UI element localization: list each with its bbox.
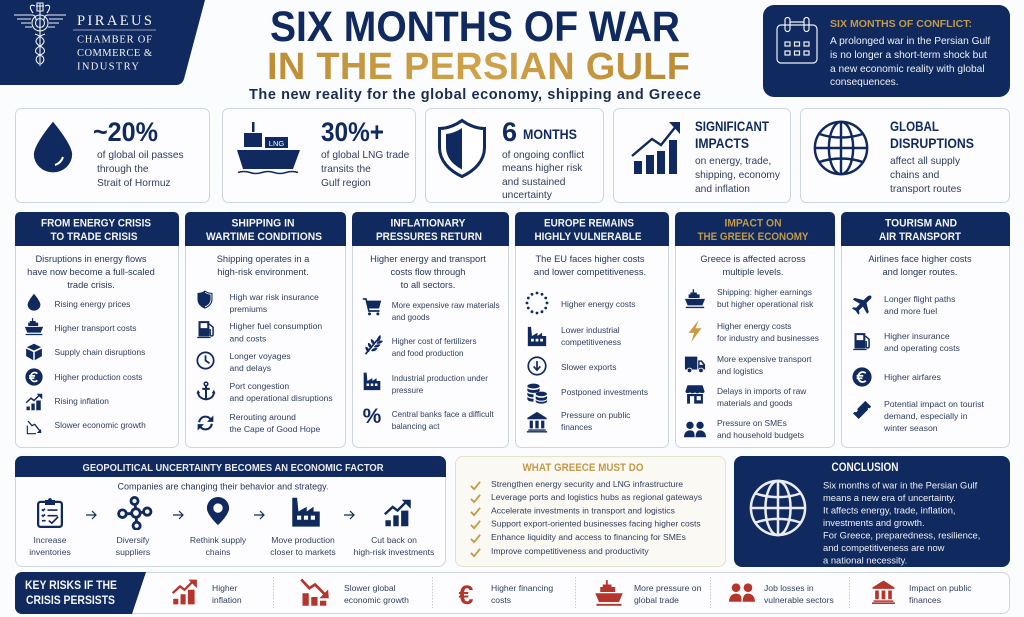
intro text: Airlines face higher costs [868, 254, 972, 264]
risk: public finances: finances [909, 595, 941, 605]
panel: key risks [15, 572, 1010, 614]
item: central banks: % [363, 405, 382, 428]
item: shipping: Shipping: higher earnings [717, 287, 812, 297]
check list [471, 479, 702, 556]
stat text: and sustained [502, 177, 566, 188]
stat text: of global oil passes [97, 150, 184, 161]
stat text: affect all supply [890, 156, 961, 167]
intro text: trade crisis. [67, 280, 115, 290]
item: insurance [853, 331, 960, 353]
panel: tourism and air transport [841, 212, 1010, 448]
title [267, 3, 690, 88]
item: public finances: finances [561, 422, 592, 432]
item: public finances [527, 410, 630, 433]
risk: global trade [595, 580, 702, 606]
intro text: costs flow through [391, 267, 465, 277]
item: port congestion [196, 381, 333, 403]
stat heading: GLOBAL [890, 119, 939, 134]
item: airfares [852, 367, 942, 387]
title: IN THE PERSIAN GULF [267, 46, 690, 88]
item: higher energy costs [526, 292, 635, 314]
step: diversify suppliers [116, 497, 151, 557]
conclusion text: means a new era of uncertainty. [823, 492, 956, 503]
stat heading: SIGNIFICANT [695, 119, 770, 134]
callout: six months of conflict [763, 5, 1010, 97]
heading: SHIPPING IN [232, 218, 295, 230]
arrow [173, 511, 183, 519]
step: move production [270, 498, 336, 557]
item: transport [685, 354, 812, 376]
intro text: The EU faces higher costs [535, 254, 645, 264]
stat text: transport routes [890, 184, 961, 195]
callout text: a new economic reality with global [830, 64, 985, 75]
intro text: and lower competitiveness. [534, 267, 646, 277]
item: tourist demand: winter season [883, 423, 938, 433]
conclusion text: a national necessity. [823, 554, 907, 566]
conclusion text: For Greece, preparedness, resilience, [823, 530, 980, 540]
item: industrial production: Industrial production under [392, 374, 488, 383]
item: fertilizers: Higher cost of fertilizers [392, 337, 477, 346]
item: central banks [363, 405, 494, 431]
intro text: and longer routes. [883, 267, 957, 277]
risk: job losses: Job losses in [764, 583, 814, 593]
item: higher production costs [25, 368, 142, 386]
item: war risk premiums: premiums [230, 304, 267, 314]
risk: public finances: Impact on public [909, 583, 972, 593]
item: port congestion: and operational disruptions [230, 393, 333, 403]
check list: Leverage ports and logistics hubs as regional gateways [491, 492, 702, 502]
intro text: multiple levels. [723, 267, 783, 277]
stat text: Strait of Hormuz [97, 178, 171, 189]
subtitle: The new reality for the global economy, shipping and Greece [249, 87, 701, 103]
item: imports: Delays in imports of raw [717, 386, 807, 396]
check list: Accelerate investments in transport and logistics [491, 506, 675, 516]
item: lower competitiveness: Lower industrial [561, 325, 620, 335]
item: rerouting [198, 412, 320, 434]
organisation name: PIRAEUS [77, 13, 152, 29]
item: central banks: Central banks face a difficult [392, 410, 494, 419]
item: tourist demand: demand, especially in [884, 411, 968, 421]
stat text: chains and [890, 170, 940, 181]
arrow [344, 511, 354, 519]
stat heading [695, 119, 770, 151]
intro text: Companies are changing their behavior and strategy. [118, 482, 328, 492]
stat text: of global LNG trade [321, 150, 410, 161]
stat value: 6 [502, 117, 517, 147]
conclusion text: It affects energy, trade, inflation, [823, 504, 956, 516]
check list: Improve competitiveness and productivity [491, 546, 649, 556]
item: flight paths [852, 294, 956, 316]
heading: EUROPE REMAINS [544, 218, 634, 230]
conclusion text: Six months of war in the Persian Gulf [823, 480, 978, 490]
risk: global trade: global trade [634, 595, 679, 605]
item: longer voyages: and delays [230, 363, 271, 373]
item: higher transport costs [25, 318, 136, 335]
item: shipping [685, 287, 814, 309]
item: fertilizers [365, 335, 477, 358]
step: diversify suppliers: Diversify [117, 535, 150, 545]
item: slower economic growth: Slower economic growth [54, 420, 146, 430]
heading: WARTIME CONDITIONS [206, 231, 322, 243]
stat card: global disruptions [800, 108, 1010, 202]
item: fertilizers: and food production [392, 349, 464, 358]
risk: higher inflation [173, 580, 242, 605]
heading: TOURISM AND [885, 218, 957, 230]
item: rising energy prices: Rising energy prices [54, 299, 130, 309]
stat card: significant impacts [614, 108, 790, 202]
icon: oil drop [34, 122, 72, 172]
item: port congestion: Port congestion [230, 381, 289, 391]
stat card: oil [16, 108, 210, 202]
item: industrial production: pressure [392, 386, 424, 395]
heading: AIR TRANSPORT [879, 231, 961, 243]
callout text: consequences. [830, 77, 899, 88]
stat text: Gulf region [321, 178, 371, 189]
step: diversify suppliers: suppliers [116, 547, 150, 557]
stat text: and inflation [695, 184, 750, 195]
item: lower competitiveness: competitiveness [561, 337, 621, 347]
item: central banks: balancing act [392, 422, 440, 431]
arrow [86, 511, 96, 519]
risk: financing costs: Higher financing [491, 583, 553, 593]
stat heading: DISRUPTIONS [890, 136, 974, 151]
icon: globe [815, 122, 867, 174]
organisation name: CHAMBER OF [77, 34, 152, 46]
panel: shipping in wartime conditions [185, 212, 346, 448]
item: postponed investments [527, 384, 648, 404]
organisation name [73, 13, 156, 72]
item: fuel consumption [197, 321, 322, 344]
stat text: transits the [321, 164, 371, 175]
heading: KEY RISKS IF THE [25, 580, 117, 592]
item: rising energy prices [28, 294, 130, 311]
risk: job losses [729, 583, 834, 605]
item: transport: More expensive transport [717, 354, 812, 364]
step: rethink supply chains: chains [206, 547, 230, 557]
item: slower exports [528, 357, 616, 375]
panel: geopolitical uncertainty [15, 456, 446, 566]
item: slower exports: Slower exports [561, 362, 616, 372]
risk: higher inflation: inflation [212, 595, 242, 605]
item: SMEs [684, 418, 804, 440]
icon: LNG tanker [237, 122, 300, 174]
item: transport: and logistics [717, 366, 763, 376]
item: rerouting: Rerouting around [230, 412, 296, 422]
item: higher production costs: Higher production costs [54, 372, 142, 382]
stat value [502, 117, 577, 147]
item: flight paths: and more fuel [884, 306, 937, 316]
heading [25, 580, 117, 607]
stat heading [890, 119, 974, 151]
stat value: 30%+ [321, 117, 384, 147]
stat card: six months [426, 108, 604, 202]
item: supply chain disruptions: Supply chain disruptions [54, 347, 145, 357]
item: rerouting: the Cape of Good Hope [230, 424, 320, 434]
panel: impact on the Greek economy [675, 212, 835, 448]
risk: slower growth: economic growth [344, 595, 409, 605]
item: imports [685, 385, 807, 408]
item: tourist demand [853, 399, 985, 433]
panel: from energy crisis to trade crisis [15, 212, 179, 448]
intro text: Greece is affected across [700, 254, 806, 264]
item: insurance: and operating costs [884, 343, 960, 353]
item: industrial production [364, 373, 488, 395]
check list: Strengthen energy security and LNG infrastructure [491, 479, 683, 489]
intro text: Shipping operates in a [217, 254, 310, 264]
risk: higher inflation: Higher [212, 583, 237, 593]
callout text: is no longer a short-term shock but [830, 50, 987, 61]
icon: shield [440, 120, 484, 176]
intro text: Higher energy and transport [370, 254, 486, 264]
step: move production: Move production [271, 535, 335, 545]
stat text: uncertainty [502, 190, 553, 201]
logo panel [0, 0, 205, 85]
risk: financing costs: € [458, 580, 474, 610]
item: energy costs [689, 320, 819, 343]
step: rethink supply chains [190, 497, 247, 557]
step: cut back: Cut back on [371, 535, 417, 545]
item: war risk premiums [198, 290, 319, 314]
icon: calendar [777, 18, 817, 63]
item: rising inflation [26, 394, 109, 410]
item: postponed investments: Postponed investments [561, 387, 648, 397]
risk: slower growth: Slower global [344, 583, 396, 593]
heading: FROM ENERGY CRISIS [41, 218, 151, 230]
item: higher energy costs: Higher energy costs [561, 299, 635, 309]
panel: Europe remains highly vulnerable [515, 212, 669, 448]
intro text: Disruptions in energy flows [35, 254, 147, 264]
item: shipping: but higher operational risk [717, 299, 814, 309]
risk: global trade: More pressure on [634, 583, 702, 593]
organisation name: INDUSTRY [77, 62, 139, 72]
icon: growth chart [632, 122, 680, 174]
heading: PRESSURES RETURN [376, 231, 482, 243]
conclusion text: investments and growth. [823, 517, 925, 528]
item: fuel consumption: Higher fuel consumption [230, 321, 322, 331]
icon: LNG tanker: LNG [269, 139, 284, 148]
step: cut back: high-risk investments [354, 547, 434, 557]
item: war risk premiums: High war risk insurance [230, 292, 319, 302]
step: increase inventories: Increase [34, 535, 67, 545]
item: energy costs: for industry and businesses [717, 333, 819, 343]
intro text: to all sectors. [401, 280, 455, 290]
item: tourist demand: Potential impact on tourist [884, 399, 985, 409]
title: SIX MONTHS OF WAR [270, 3, 680, 51]
step: rethink supply chains: Rethink supply [190, 535, 247, 545]
item: rising inflation: Rising inflation [54, 396, 109, 406]
item: lower competitiveness [528, 325, 621, 347]
panel: conclusion [734, 456, 1010, 567]
stat heading: IMPACTS [695, 136, 749, 151]
item: longer voyages: Longer voyages [230, 351, 291, 361]
stat value: ~20% [93, 117, 158, 147]
heading: CRISIS PERSISTS [26, 595, 115, 607]
panel: inflationary pressures return [352, 212, 509, 448]
stat card: LNG [222, 108, 416, 202]
icon: caduceus emblem [14, 3, 66, 66]
stat text: on energy, trade, [695, 156, 771, 167]
intro text: have now become a full-scaled [27, 267, 155, 277]
item: airfares: Higher airfares [884, 372, 942, 382]
item: higher transport costs: Higher transport costs [54, 323, 136, 333]
heading: IMPACT ON [724, 218, 782, 230]
heading: GEOPOLITICAL UNCERTAINTY BECOMES AN ECONOMIC FACTOR [82, 462, 384, 474]
icon: globe [751, 481, 805, 535]
item: SMEs: Pressure on SMEs [717, 418, 787, 428]
heading: INFLATIONARY [390, 218, 466, 230]
stat value: MONTHS [523, 127, 577, 142]
item: energy costs: Higher energy costs [717, 321, 791, 331]
risk: job losses: vulnerable sectors [764, 595, 834, 605]
callout text: A prolonged war in the Persian Gulf [830, 36, 990, 47]
item: raw materials: More expensive raw materials [392, 301, 500, 310]
item: raw materials [363, 298, 500, 322]
conclusion text: and competitiveness are now [823, 542, 945, 553]
item: longer voyages [197, 351, 291, 373]
item: imports: materials and goods [717, 398, 792, 408]
stat text: of ongoing conflict [502, 150, 584, 161]
item: flight paths: Longer flight paths [884, 294, 956, 304]
arrow [254, 511, 264, 519]
item: fuel consumption: and costs [230, 334, 266, 344]
step: increase inventories [29, 498, 71, 557]
check list: Enhance liquidity and access to financing for SMEs [491, 532, 686, 542]
risk: financing costs: costs [491, 595, 511, 605]
stat text: shipping, economy [695, 170, 781, 181]
item: slower economic growth [27, 420, 146, 434]
risk: financing costs [458, 580, 553, 610]
heading: HIGHLY VULNERABLE [534, 231, 642, 243]
organisation name: COMMERCE & [77, 48, 152, 59]
check list: Support export-oriented businesses facing higher costs [491, 518, 701, 528]
item: raw materials: and goods [392, 313, 430, 322]
stat text: through the [97, 164, 149, 175]
risk: slower growth [301, 580, 409, 606]
item: supply chain disruptions [26, 344, 145, 360]
step: cut back [354, 500, 434, 557]
panel: what Greece must do [456, 456, 726, 566]
item: SMEs: and household budgets [717, 430, 804, 440]
callout heading: SIX MONTHS OF CONFLICT: [830, 18, 972, 30]
heading: TO TRADE CRISIS [50, 231, 138, 243]
item: insurance: Higher insurance [884, 331, 950, 341]
risk: public finances [872, 581, 972, 605]
step: increase inventories: inventories [29, 547, 71, 557]
item: public finances: Pressure on public [561, 410, 630, 420]
heading: THE GREEK ECONOMY [698, 231, 809, 243]
heading: CONCLUSION [832, 462, 898, 474]
stat text: means higher risk [502, 163, 583, 174]
step: move production: closer to markets [270, 547, 336, 557]
intro text: high-risk environment. [217, 267, 309, 277]
heading: WHAT GREECE MUST DO [522, 462, 644, 474]
